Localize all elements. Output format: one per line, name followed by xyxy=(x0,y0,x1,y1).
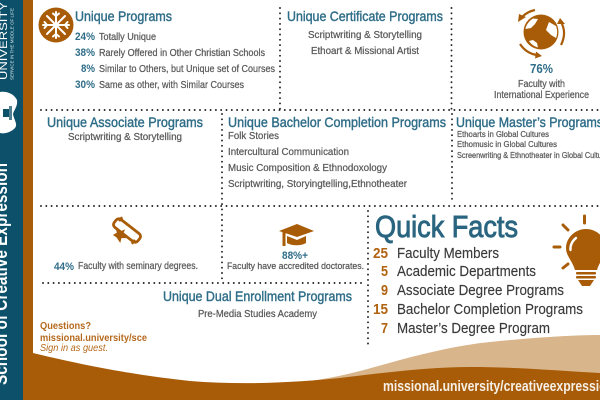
fact: faculty members: 25 xyxy=(373,245,388,262)
panel: unique associate programs: Scriptwriting & Storytelling xyxy=(68,132,182,143)
heading: unique programs: Unique Programs xyxy=(75,8,172,24)
callout: questions: Sign in as guest. xyxy=(40,342,108,354)
panel: seminary degrees xyxy=(54,215,198,273)
icon: snowflake xyxy=(38,8,74,42)
fact: master's degree program: 7 xyxy=(381,320,388,337)
stat: 24%: 24% xyxy=(75,31,95,43)
panel: accredited doctorates: 88%+ xyxy=(282,250,308,262)
sidebar xyxy=(0,0,33,400)
panel: accredited doctorates: Faculty have accredited doctorates. xyxy=(227,261,364,271)
stat: 8%: 8% xyxy=(81,63,95,75)
stat: 8%: Similar to Others, but Unique set of Courses xyxy=(99,64,275,75)
panel: unique dual enrollment programs xyxy=(163,288,352,320)
panel: seminary degrees: 44% xyxy=(54,261,74,273)
fact: master's degree program: Master’s Degree Program xyxy=(397,320,550,337)
fact: faculty members: Faculty Members xyxy=(397,245,499,262)
stat: 38%: 38% xyxy=(75,47,95,59)
icon: graduation cap xyxy=(279,224,314,246)
panel: international experience: International Experience xyxy=(494,90,589,101)
panel: unique bachelor completion programs: Scriptwriting, Storyingtelling,Ethnotheater xyxy=(228,179,408,190)
heading: quick facts: Quick Facts xyxy=(375,209,518,244)
panel: seminary degrees: Faculty with seminary degrees. xyxy=(78,261,198,272)
stat: 30%: Same as other, with Similar Courses xyxy=(99,80,244,91)
footer wave: orange xyxy=(33,353,600,400)
panel: accredited doctorates xyxy=(227,224,364,271)
panel: unique master's programs: Ethomusic in Global Cultures xyxy=(457,139,557,149)
panel: unique bachelor completion programs: Unique Bachelor Completion Programs xyxy=(228,114,446,130)
panel: unique associate programs xyxy=(47,114,203,143)
panel: unique programs xyxy=(38,8,275,91)
panel: international experience: Faculty with xyxy=(518,79,565,90)
fact: bachelor completion programs: Bachelor Completion Programs xyxy=(397,301,583,318)
panel: unique bachelor completion programs xyxy=(228,114,446,190)
footer wave: tan xyxy=(300,335,600,400)
panel: unique certificate programs: Scriptwriting & Storytelling xyxy=(308,30,422,41)
fact: associate degree programs: Associate Degree Programs xyxy=(397,282,564,299)
stat: 38%: Rarely Offered in Other Christian Schools xyxy=(99,48,265,59)
panel: unique certificate programs: Unique Certificate Programs xyxy=(287,8,443,24)
stat: 24%: Totally Unique xyxy=(99,32,156,43)
icon: light bulb xyxy=(554,216,600,286)
callout: questions xyxy=(40,320,147,354)
icon: diploma xyxy=(111,215,143,246)
panel: quick facts xyxy=(373,209,583,337)
callout: questions: Questions? xyxy=(40,320,91,332)
panel: unique associate programs: Unique Associate Programs xyxy=(47,114,203,130)
panel: unique bachelor completion programs: Music Composition & Ethnodoxology xyxy=(228,163,387,174)
panel: unique certificate programs xyxy=(287,8,443,57)
sidebar logo xyxy=(0,92,17,133)
panel: unique bachelor completion programs: Folk Stories xyxy=(228,131,279,142)
panel: international experience: 76% xyxy=(530,61,553,76)
fact: academic departments: Academic Departments xyxy=(397,263,536,280)
icon: globe with arrows xyxy=(518,10,565,58)
panel: unique bachelor completion programs: Intercultural Communication xyxy=(228,147,349,158)
panel: unique master's programs: Ethoarts in Global Cultures xyxy=(457,129,549,139)
sidebar tagline: SERVICE IN THE MIDDLE OF LIFE xyxy=(10,8,14,80)
panel: unique dual enrollment programs: Unique Dual Enrollment Programs xyxy=(163,288,352,304)
stat: 24% xyxy=(75,31,156,43)
stat: 30%: 30% xyxy=(75,79,95,91)
panel: unique certificate programs: Ethoart & Missional Artist xyxy=(311,46,419,57)
fact: associate degree programs: 9 xyxy=(381,282,388,299)
fact: bachelor completion programs: 15 xyxy=(373,301,388,318)
fact: academic departments: 5 xyxy=(381,263,388,280)
callout: questions: missional.university/sce xyxy=(40,332,147,344)
panel: international experience xyxy=(494,10,589,101)
panel: unique dual enrollment programs: Pre-Media Studies Academy xyxy=(198,309,317,320)
panel: unique master's programs xyxy=(456,114,600,160)
